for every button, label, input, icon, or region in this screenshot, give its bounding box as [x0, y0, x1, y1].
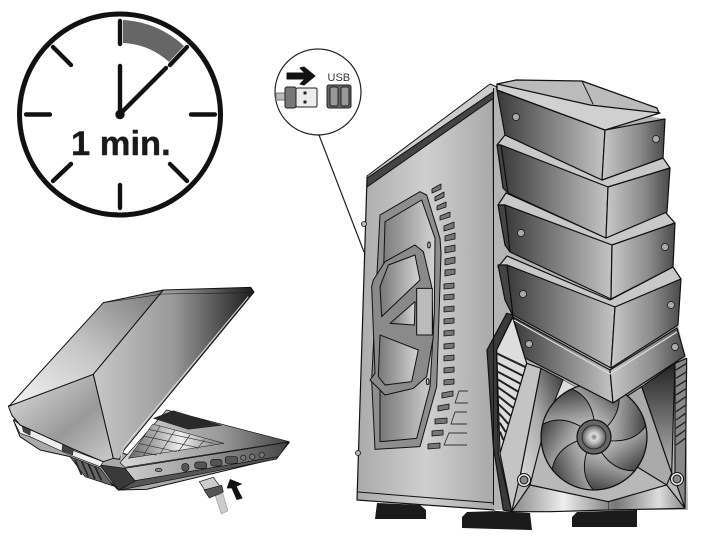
- tower front lower assembly: [487, 313, 687, 512]
- arrow: [227, 479, 243, 500]
- laptop: [8, 287, 289, 514]
- side window: [370, 192, 441, 449]
- front armour lower plate: [513, 317, 685, 403]
- fan corner screws: [518, 472, 684, 486]
- top cap: [497, 80, 660, 130]
- front armour plate 1: [497, 90, 665, 180]
- USB callout: [275, 49, 361, 135]
- tower front backing: [494, 88, 688, 510]
- laptop ports: [155, 452, 264, 472]
- USB plug: [199, 477, 228, 514]
- USB port pair: [327, 85, 351, 108]
- clock label: 1 min.: [71, 125, 171, 163]
- laptop lid: [8, 287, 254, 462]
- front armour plate 3: [498, 193, 675, 299]
- clock face: [20, 14, 220, 215]
- callout leader line: [319, 135, 364, 252]
- front armour plate 4: [498, 256, 681, 368]
- side slanted grilles: [444, 391, 468, 445]
- hour ticks: [26, 21, 215, 208]
- elapsed minute wedge: [123, 20, 184, 62]
- cooling fan: [537, 384, 651, 495]
- front armour plate 2: [497, 135, 670, 238]
- laptop base: [13, 410, 289, 490]
- tower feet: [375, 503, 637, 530]
- computer tower case: [356, 80, 688, 530]
- tower corner edge: [492, 88, 494, 505]
- clock timer: [20, 14, 220, 215]
- arrow: insert direction: [287, 67, 315, 85]
- tower side panel: [356, 84, 497, 510]
- USB label: USB: [328, 72, 350, 84]
- USB plug: [276, 87, 317, 108]
- clock hands: [118, 66, 166, 117]
- side vent slots: [428, 184, 455, 449]
